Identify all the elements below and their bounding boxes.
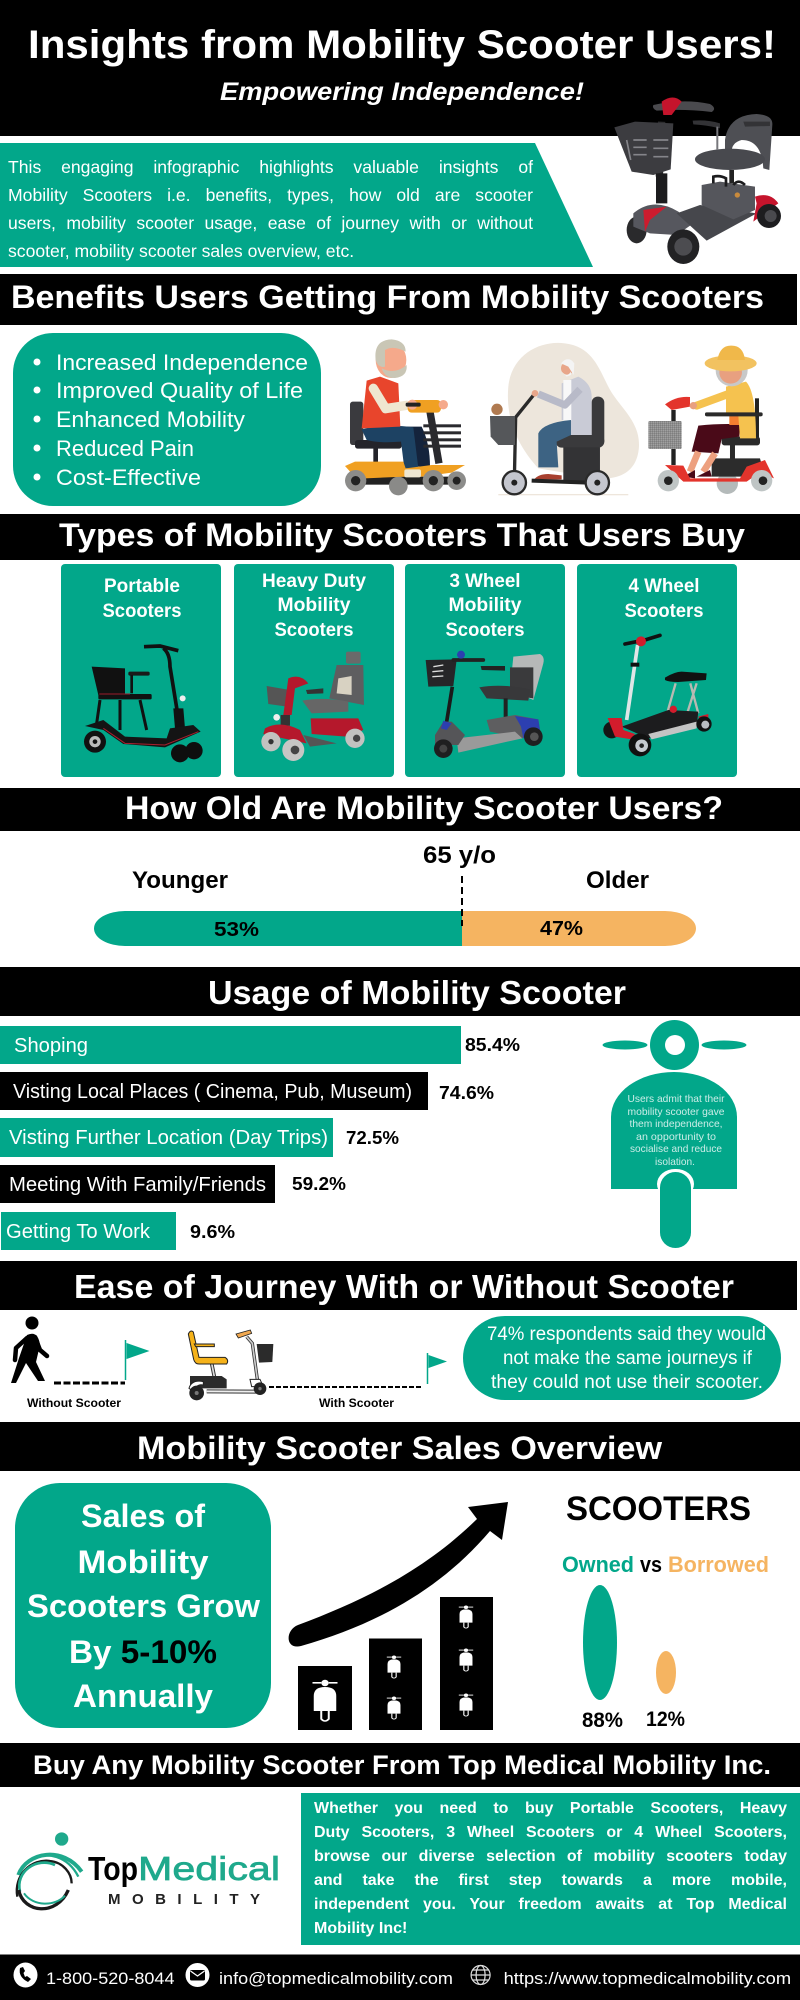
icon: globe bbox=[471, 1966, 490, 1984]
heading: ease of journey: Ease of Journey With or Without Scooter bbox=[74, 1268, 734, 1305]
website address: https://www.topmedicalmobility.com bbox=[504, 1969, 791, 1988]
legend: owned vs borrowed: vs bbox=[640, 1552, 662, 1577]
bar chart: usage: 85.4% bbox=[465, 1035, 520, 1055]
label: younger: Younger bbox=[132, 867, 228, 894]
legend: owned vs borrowed bbox=[562, 1552, 769, 1577]
icon: walking person bbox=[11, 1316, 47, 1383]
label: older: Older bbox=[586, 867, 649, 894]
label: with scooter: With Scooter bbox=[319, 1396, 394, 1410]
heading: age: How Old Are Mobility Scooter Users? bbox=[125, 790, 723, 826]
title: Insights from Mobility Scooter Users! bbox=[28, 23, 776, 67]
heading: scooters: SCOOTERS bbox=[566, 1490, 751, 1528]
call to action text bbox=[314, 1796, 789, 1942]
section: sales overview bbox=[0, 1422, 800, 1732]
chart: age split pill: 47% bbox=[540, 918, 583, 940]
intro text: This engaging infographic highlights valuable insights of bbox=[8, 157, 533, 177]
panel: heavy duty scooters: Heavy Duty bbox=[262, 571, 366, 592]
panel: portable scooters: Portable bbox=[104, 576, 180, 597]
heading: usage: Usage of Mobility Scooter bbox=[208, 974, 626, 1011]
panel: 3 wheel scooters: Scooters bbox=[446, 620, 524, 641]
heading: types: Types of Mobility Scooters That Users Buy bbox=[59, 517, 745, 553]
panel: benefits list: Increased Independence bbox=[56, 350, 308, 375]
callout: 74% respondents: they could not use their scooter. bbox=[491, 1372, 763, 1393]
arrow: growth trend bbox=[289, 1502, 508, 1647]
panel: 3 wheel scooters: Mobility bbox=[448, 595, 522, 616]
panel: sales growth: Mobility bbox=[78, 1544, 209, 1580]
panel: benefits list: Cost-Effective bbox=[56, 465, 201, 490]
heading: sales overview: Mobility Scooter Sales Overview bbox=[137, 1430, 662, 1466]
panel: 4 wheel scooters: 4 Wheel bbox=[628, 576, 700, 597]
intro text: scooter, mobility scooter sales overview, etc. bbox=[8, 241, 354, 261]
bar chart: usage: 9.6% bbox=[190, 1222, 235, 1242]
section: buy bbox=[0, 1743, 800, 1945]
icon: 3 wheel scooter bbox=[426, 651, 544, 758]
call to action text: Whether you need to buy Portable Scooters, Heavy bbox=[314, 1800, 787, 1816]
chart: owned vs borrowed ovals: 12% bbox=[646, 1708, 685, 1731]
logo mark bbox=[17, 1832, 82, 1909]
icon: scooter callout bbox=[602, 1020, 746, 1248]
icon: hero mobility scooter bbox=[614, 97, 781, 264]
panel: heavy duty scooters bbox=[234, 564, 394, 777]
panel: benefits list: Improved Quality of Life bbox=[56, 378, 303, 403]
panel: introduction bbox=[0, 143, 593, 267]
section: user age bbox=[0, 788, 800, 946]
callout text: socialise and reduce bbox=[630, 1143, 722, 1155]
callout text: isolation. bbox=[655, 1156, 695, 1168]
panel: benefits list bbox=[13, 333, 321, 506]
section: types of scooters bbox=[0, 514, 800, 777]
panel: sales growth: Sales of bbox=[81, 1498, 205, 1534]
legend: owned vs borrowed: Borrowed bbox=[668, 1552, 769, 1577]
callout: 74% respondents: 74% respondents said they would bbox=[487, 1324, 766, 1345]
logo wordmark: Top bbox=[88, 1850, 138, 1887]
callout text: mobility scooter gave bbox=[628, 1106, 725, 1118]
callout: 74% respondents bbox=[463, 1316, 781, 1400]
bar chart: usage: 72.5% bbox=[346, 1128, 399, 1148]
bar chart: usage: Getting To Work bbox=[6, 1221, 151, 1243]
panel: sales growth: By 5-10% bbox=[69, 1634, 217, 1670]
panel: 3 wheel scooters bbox=[405, 564, 565, 777]
intro text: users, mobility scooter usage, ease of journey with or without bbox=[8, 213, 533, 233]
panel: portable scooters: Scooters bbox=[102, 601, 182, 622]
bar chart: usage bbox=[0, 1026, 520, 1250]
section: usage bbox=[0, 967, 800, 1250]
icon: man on orange scooter bbox=[345, 339, 466, 495]
phone number: 1-800-520-8044 bbox=[46, 1969, 174, 1988]
panel: sales growth: Annually bbox=[73, 1678, 213, 1714]
chart: age split pill: 53% bbox=[214, 919, 259, 941]
route: with scooter bbox=[269, 1353, 447, 1387]
callout text: an opportunity to bbox=[636, 1131, 716, 1143]
call to action text: independent you. Your freedom awaits at Top Medical bbox=[314, 1896, 787, 1912]
section: ease of journey bbox=[0, 1261, 797, 1410]
panel: benefits list: Reduced Pain bbox=[56, 436, 194, 461]
section: benefits bbox=[0, 274, 797, 506]
panel: heavy duty scooters: Mobility bbox=[278, 595, 351, 616]
panel: heavy duty scooters: Scooters bbox=[274, 620, 354, 641]
chart: owned vs borrowed ovals bbox=[582, 1585, 685, 1732]
logo: Top Medical Mobility bbox=[17, 1832, 280, 1909]
email address: info@topmedicalmobility.com bbox=[219, 1969, 453, 1988]
title banner bbox=[0, 0, 800, 136]
logo: Top Medical Mobility: Medical bbox=[138, 1850, 280, 1887]
bar chart: usage: Visting Local Places ( Cinema, Pub, Museum) bbox=[13, 1081, 412, 1103]
icon: woman on red scooter bbox=[648, 346, 774, 494]
panel: benefits list: Enhanced Mobility bbox=[56, 407, 245, 432]
chart: growth bars bbox=[298, 1597, 493, 1730]
bar chart: usage: 59.2% bbox=[292, 1174, 346, 1194]
legend: owned vs borrowed: Owned bbox=[562, 1552, 634, 1577]
panel: sales growth: Scooters Grow bbox=[27, 1588, 260, 1624]
chart: age split pill bbox=[94, 876, 696, 946]
panel: sales growth bbox=[15, 1483, 271, 1728]
call to action text: and take the first step towards a more mobile, bbox=[314, 1872, 787, 1888]
heading: buy: Buy Any Mobility Scooter From Top Medical Mobility Inc. bbox=[33, 1750, 771, 1780]
icon: 4 wheel scooter bbox=[603, 635, 712, 756]
intro text: Mobility Scooters i.e. benefits, types, how old are scooter bbox=[8, 185, 533, 205]
callout: 74% respondents: not make the same journeys if bbox=[503, 1348, 753, 1369]
icon: phone bbox=[14, 1962, 38, 1988]
icon: small scooter bbox=[188, 1330, 273, 1400]
route: without scooter bbox=[54, 1340, 150, 1383]
bar chart: usage: 74.6% bbox=[439, 1083, 494, 1103]
callout text: them independence, bbox=[630, 1118, 722, 1130]
icon: heavy duty scooter bbox=[261, 652, 365, 761]
panel: 4 wheel scooters bbox=[577, 564, 737, 777]
bar chart: usage: Visting Further Location (Day Trips) bbox=[9, 1127, 328, 1149]
callout text bbox=[628, 1093, 725, 1168]
logo: Top Medical Mobility: MOBILITY bbox=[108, 1891, 260, 1908]
icon: portable scooter bbox=[84, 646, 203, 762]
heading: benefits: Benefits Users Getting From Mobility Scooters bbox=[11, 279, 764, 315]
bar chart: usage: Shoping bbox=[14, 1035, 88, 1057]
chart: owned vs borrowed ovals: 88% bbox=[582, 1709, 623, 1732]
call to action text: Mobility Inc! bbox=[314, 1920, 407, 1936]
footer: contact details bbox=[0, 1954, 800, 2000]
icon: mail bbox=[186, 1963, 210, 1987]
panel: 4 wheel scooters: Scooters bbox=[624, 601, 704, 622]
bar chart: usage: Meeting With Family/Friends bbox=[9, 1174, 266, 1196]
icon: bearded man on black scooter bbox=[490, 343, 639, 495]
panel: portable scooters bbox=[61, 564, 221, 777]
label: without scooter: Without Scooter bbox=[27, 1396, 121, 1410]
callout text: Users admit that their bbox=[628, 1093, 725, 1105]
label: 65 y/o: 65 y/o bbox=[423, 842, 496, 869]
intro text bbox=[8, 153, 534, 265]
panel: call to action bbox=[301, 1793, 800, 1945]
subtitle: Empowering Independence! bbox=[220, 78, 584, 106]
call to action text: browse our diverse selection of mobility scooters today bbox=[314, 1848, 787, 1864]
panel: 3 wheel scooters: 3 Wheel bbox=[450, 571, 520, 592]
call to action text: Duty Scooters, 3 Wheel Scooters or 4 Wheel Scooters, bbox=[314, 1824, 787, 1840]
